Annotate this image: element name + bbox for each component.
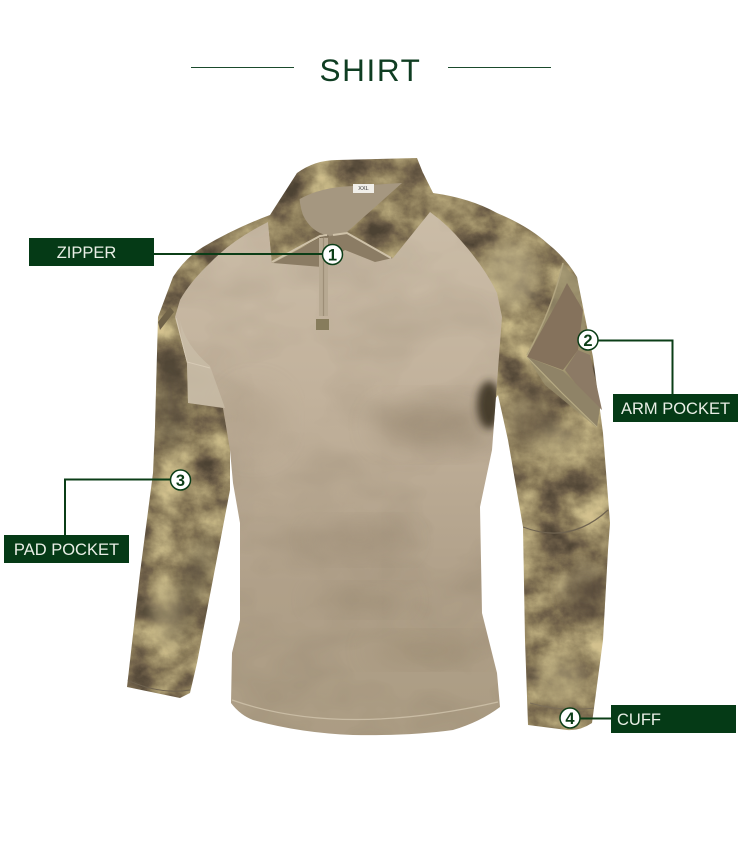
back of neck <box>298 183 402 236</box>
shirt illustration <box>127 158 610 736</box>
callout 3: pad pocket <box>4 470 190 563</box>
collar shadow <box>273 233 393 267</box>
collar <box>268 173 433 267</box>
size label <box>353 184 374 193</box>
label box: PAD POCKET: PAD POCKET <box>14 541 119 559</box>
label box: ARM POCKET <box>613 394 738 422</box>
tan body panel <box>175 212 502 736</box>
number marker 4: 4 <box>565 710 575 728</box>
number marker 3: 3 <box>176 472 185 490</box>
label box: CUFF <box>611 705 736 733</box>
title: SHIRT: SHIRT <box>320 52 421 88</box>
arm pocket patch <box>527 263 602 427</box>
camouflage collar flaps <box>268 173 433 263</box>
number marker 1 <box>322 244 342 264</box>
size label: XXL <box>358 186 369 192</box>
left sleeve flap <box>158 307 174 330</box>
label box: ARM POCKET: ARM POCKET <box>621 400 730 418</box>
callout 2: arm pocket <box>578 330 738 422</box>
number marker 2: 2 <box>583 332 593 350</box>
number marker 4 <box>560 708 580 728</box>
label box: ZIPPER <box>29 238 154 266</box>
number marker 2 <box>578 330 598 350</box>
zipper placket <box>316 238 329 330</box>
label box: ZIPPER: ZIPPER <box>57 244 116 262</box>
callout 4: cuff <box>560 705 736 733</box>
callout 1: zipper <box>29 238 342 266</box>
number marker 1: 1 <box>328 246 337 264</box>
camouflage sleeves and shoulders <box>127 158 610 730</box>
label box: CUFF: CUFF <box>617 711 661 729</box>
number marker 3 <box>170 470 190 490</box>
label box: PAD POCKET <box>4 535 129 563</box>
